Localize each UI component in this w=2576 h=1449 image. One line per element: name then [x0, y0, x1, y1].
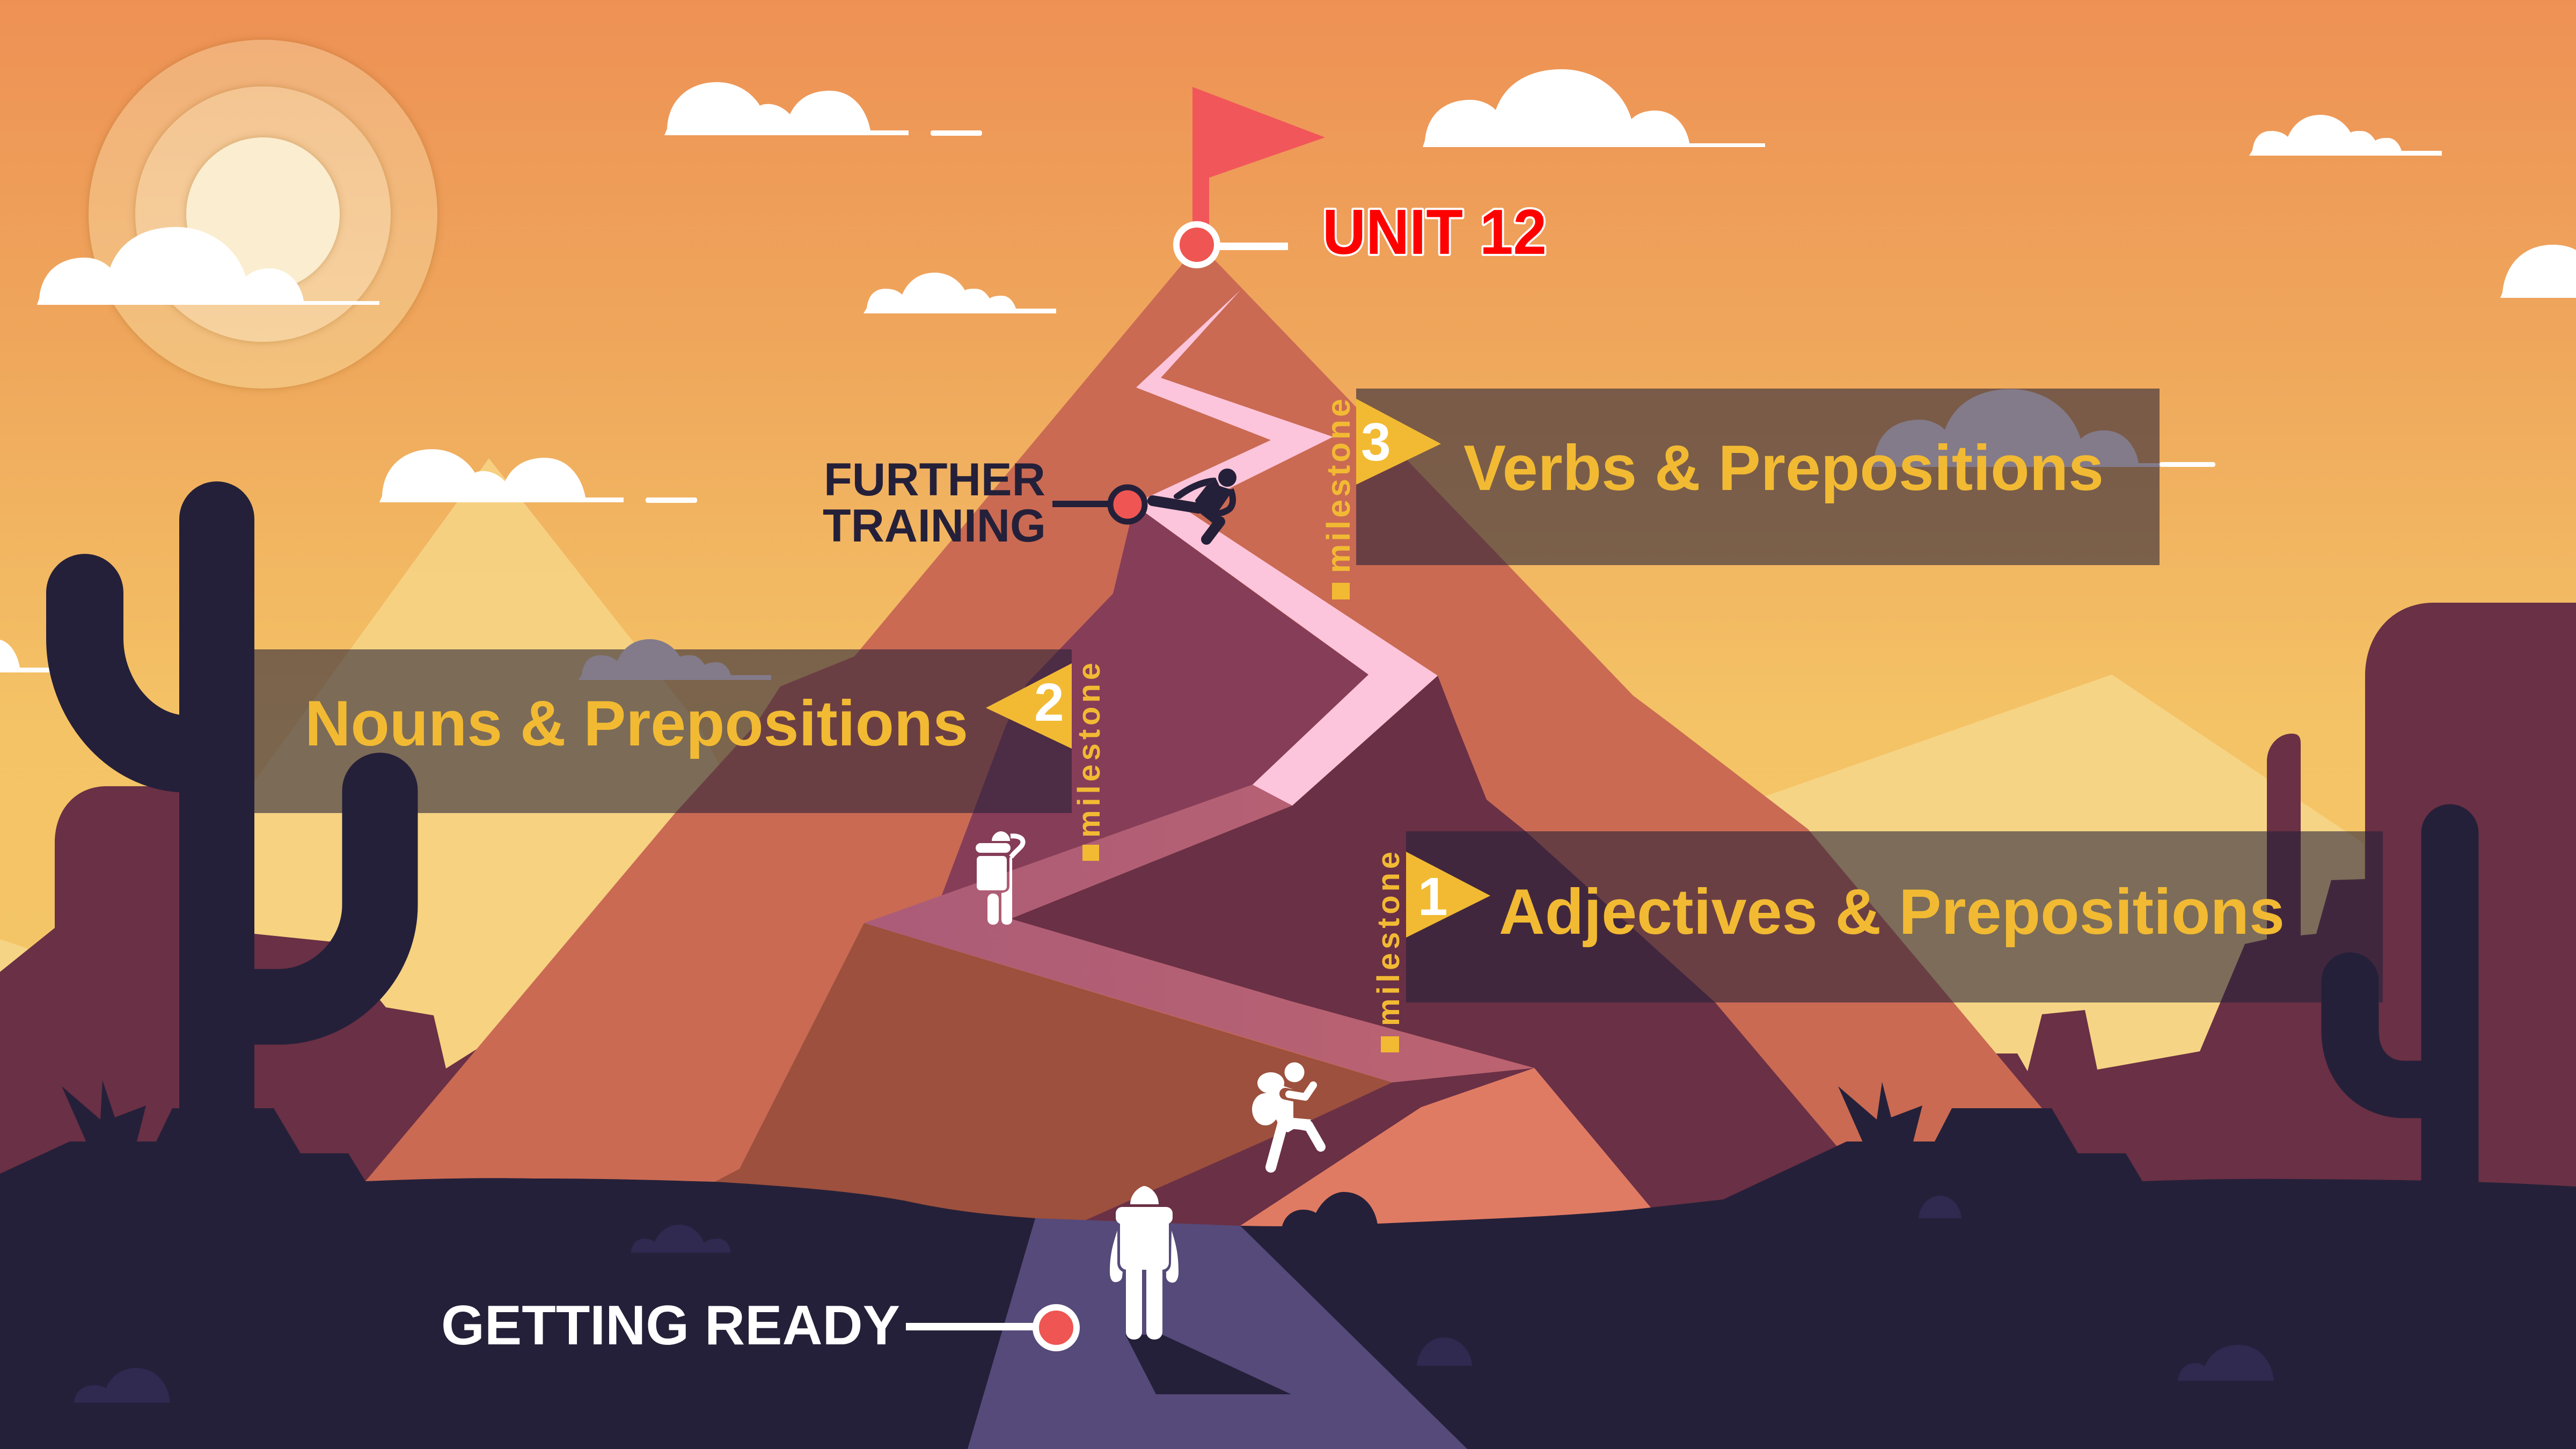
facet: orange base [365, 252, 2093, 1245]
figure: hiker climbing [1252, 1063, 1321, 1167]
small bush 1 [631, 1225, 731, 1253]
road shadow [1125, 1335, 1291, 1394]
milestone 1 marker: milestone [1371, 852, 1406, 1026]
trail: pink section [1136, 290, 1438, 806]
figure: climber kicking [1153, 469, 1236, 539]
cloud left edge [0, 640, 53, 672]
milestone 3 marker: milestone [1320, 399, 1357, 573]
label: further training: FURTHER [824, 454, 1045, 506]
node: unit 12 [1176, 224, 1288, 265]
cloud top centre-left [664, 82, 982, 136]
main mountain [365, 252, 2093, 1250]
label: further training: TRAINING [823, 500, 1046, 552]
milestone 1 marker: 1 [1418, 867, 1448, 927]
icon: cactus left [85, 519, 380, 1208]
heading: nouns & prepositions: Nouns & Prepositions [305, 687, 968, 759]
icon: spiky plant left [62, 1080, 146, 1146]
mesa right [1986, 603, 2576, 1288]
small bush 5 [2178, 1345, 2274, 1381]
cloud top centre [1423, 69, 1765, 147]
cloud behind verbs panel [1872, 389, 2160, 467]
figure: hiker resting [976, 831, 1023, 925]
icon: cactus right [2350, 833, 2450, 1224]
milestone 2 marker: 2 [1034, 672, 1064, 733]
small bush 3 [1919, 1196, 1962, 1218]
distant mountain left [0, 458, 966, 1234]
heading: verbs & prepositions: Verbs & Prepositions [1463, 432, 2104, 504]
ground [0, 1108, 2576, 1449]
node: getting ready [906, 1307, 1077, 1348]
facet: plum centre [941, 513, 1368, 898]
small bush 4 [1417, 1337, 1472, 1366]
icon: flag [1192, 87, 1325, 236]
distant mountain right [1664, 675, 2364, 1127]
cloud small top right [2249, 115, 2442, 156]
icon: spiky plant right [1838, 1082, 1922, 1146]
milestone 2 marker: milestone [1072, 663, 1107, 838]
cloud beside sun [37, 227, 379, 305]
milestone 3 marker: 3 [1361, 412, 1391, 472]
panel: nouns & prepositions [254, 649, 1072, 813]
panel: adjectives & prepositions [1406, 831, 2383, 1002]
icon: bush by road [1282, 1192, 1378, 1229]
milestone 1 marker [1371, 852, 1490, 1052]
figure: hiker standing front [1110, 1186, 1179, 1340]
cloud behind nouns panel [579, 639, 771, 680]
small bush 2 [74, 1368, 170, 1403]
facet: dark right [1011, 676, 1878, 1245]
panel: verbs & prepositions [1356, 389, 2160, 565]
label: further training [823, 454, 1046, 552]
node: further training [1052, 487, 1145, 522]
facet: coral lower [1240, 1068, 1717, 1250]
milestone 3 marker [1320, 399, 1441, 599]
trail: mauve section [864, 785, 1534, 1082]
milestone 2 marker [986, 663, 1107, 861]
cloud right edge [2500, 245, 2576, 298]
facet: brown lower [715, 923, 1392, 1245]
title: unit 12: UNIT 12 [1322, 196, 1547, 268]
label: getting ready: GETTING READY [441, 1294, 900, 1357]
cloud small near peak [863, 273, 1056, 313]
heading: adjectives & prepositions: Adjectives & Prepositions [1499, 876, 2285, 948]
icon: sun [89, 40, 437, 389]
mesa left [0, 786, 477, 1234]
cloud over distant mountain [379, 449, 697, 503]
cloud line right of verbs panel [2160, 462, 2215, 467]
road [968, 1218, 1467, 1449]
